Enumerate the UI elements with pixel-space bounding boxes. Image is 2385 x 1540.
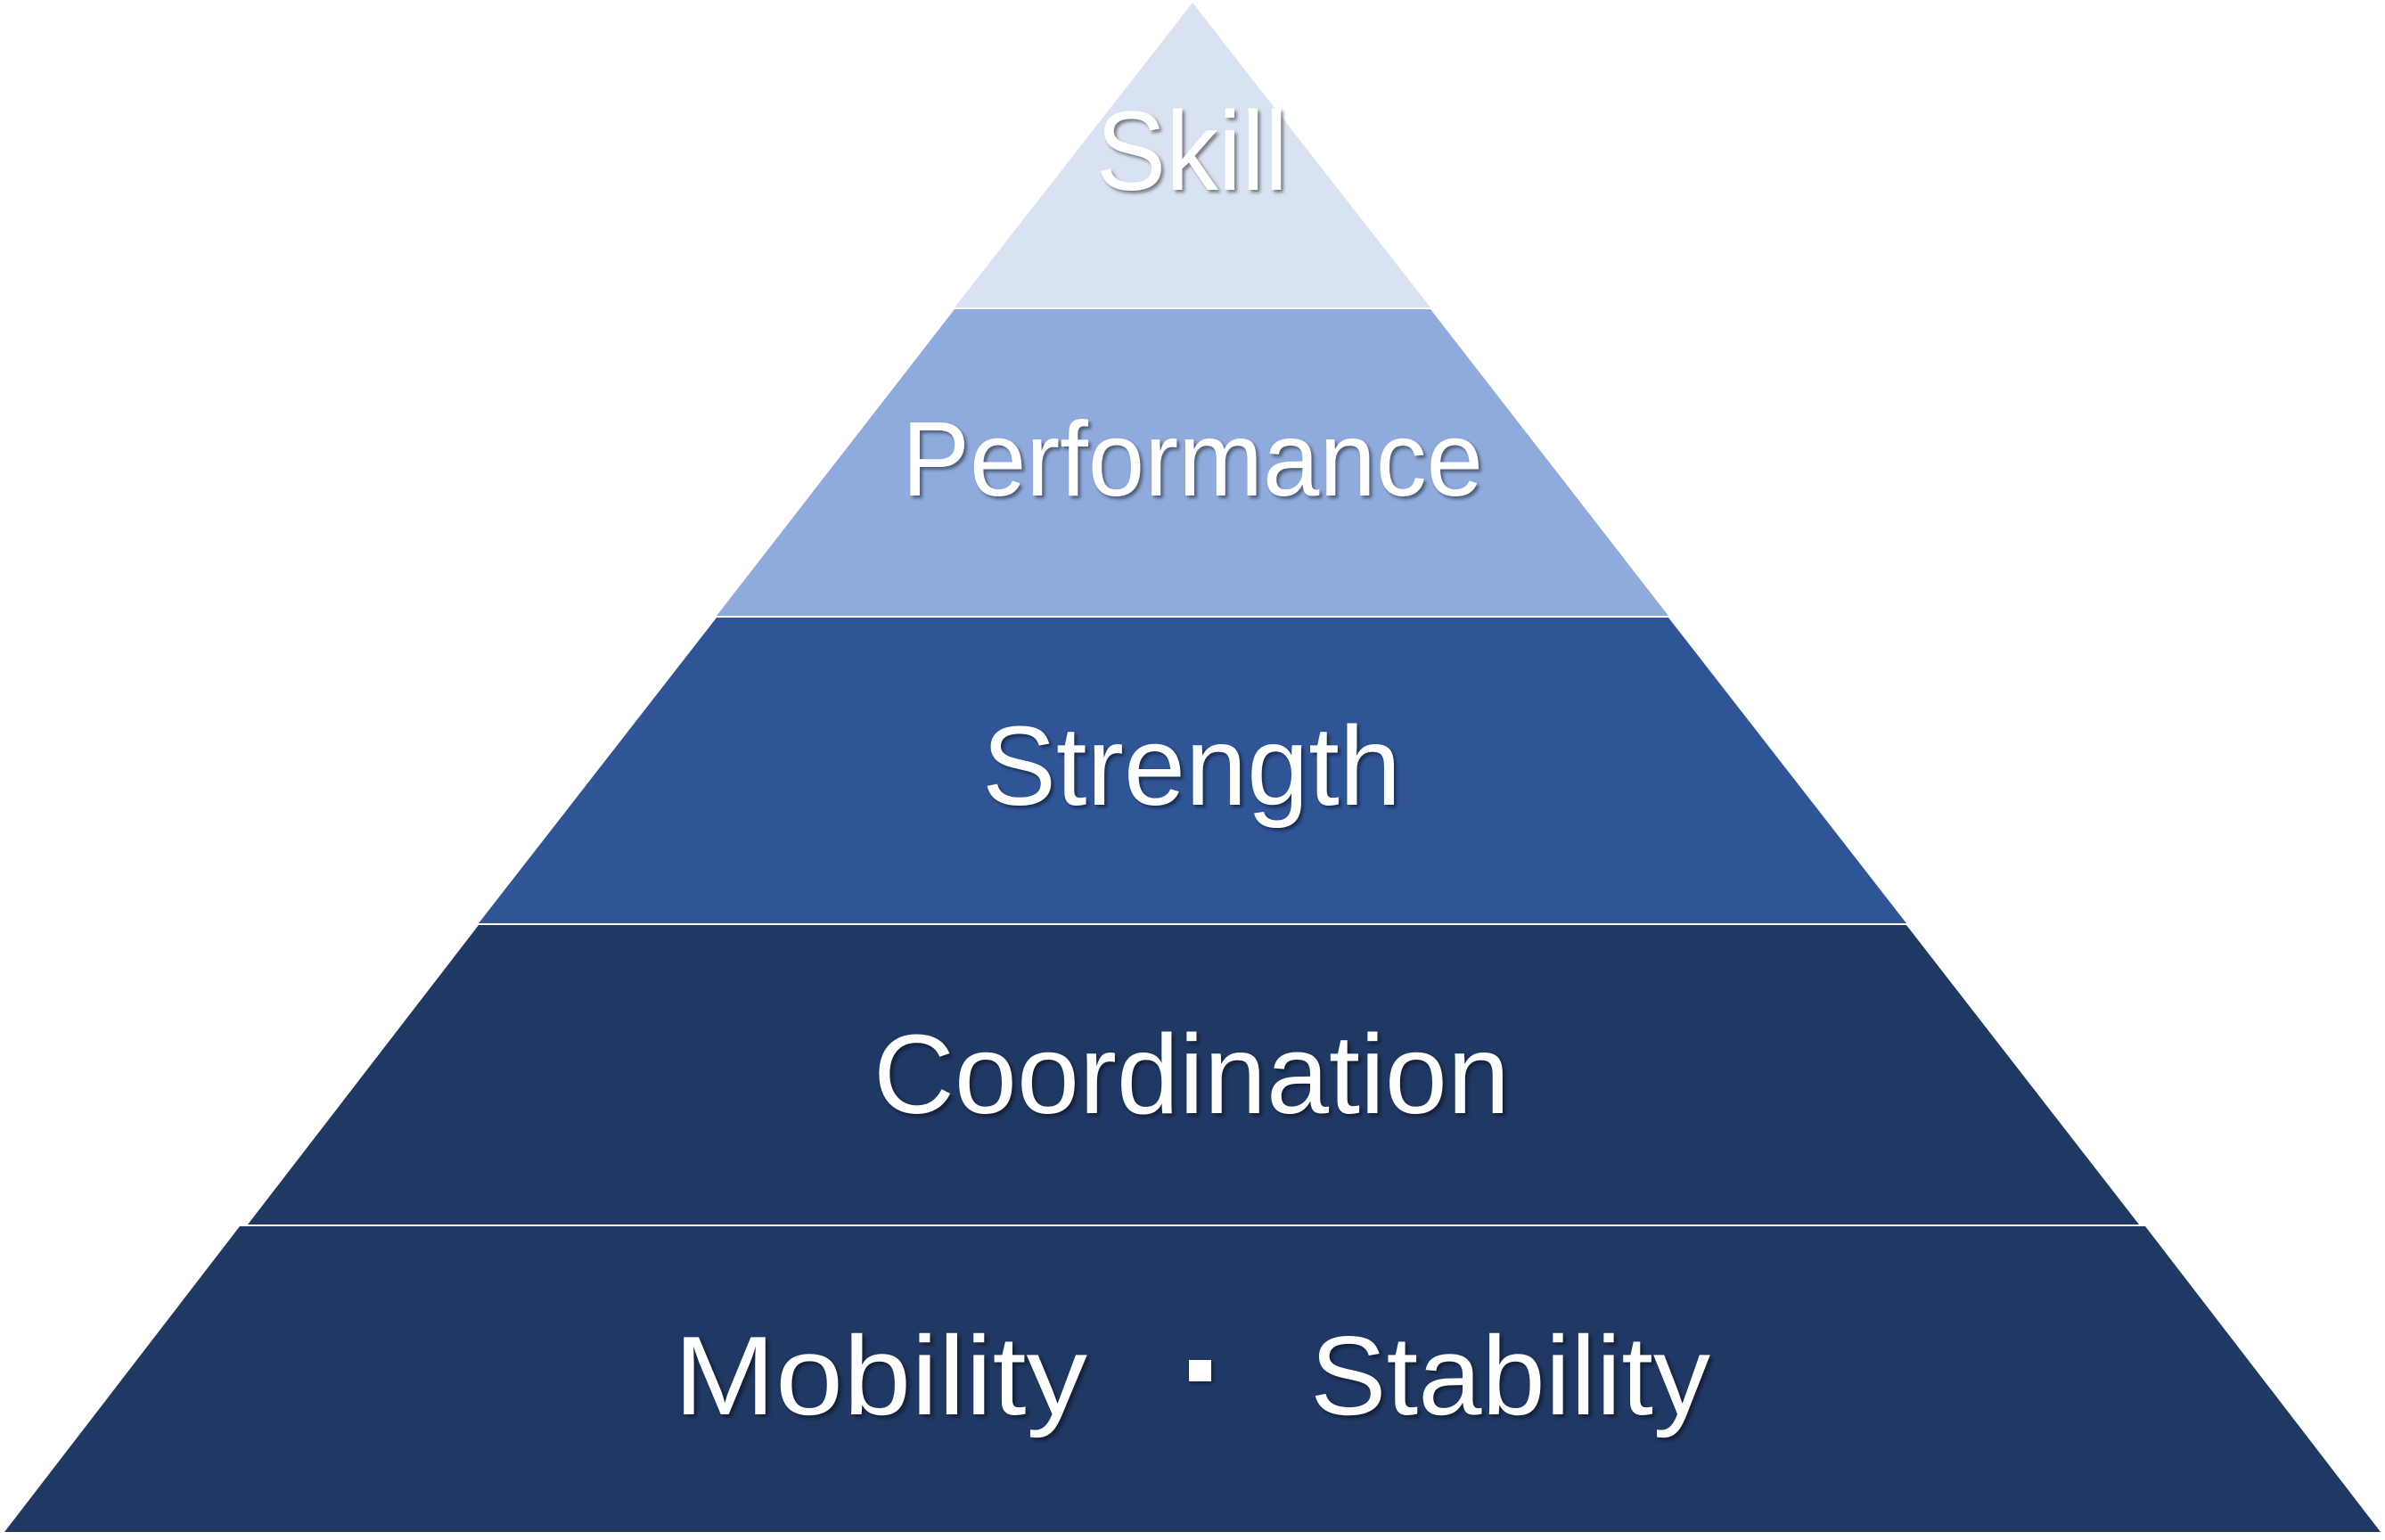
tier: Skill: [955, 3, 1430, 307]
tier: Mobility and Stability: [4, 1226, 2381, 1532]
tier: Coordination: [248, 925, 2139, 1225]
label: Skill: Skill: [1096, 88, 1288, 214]
label: Coordination: Coordination: [873, 1012, 1510, 1137]
tier: Performance: [717, 309, 1668, 616]
label: Performance: Performance: [902, 400, 1483, 519]
label: Stability: Stability: [1310, 1313, 1710, 1438]
label: Strength: Strength: [982, 703, 1401, 829]
label: Mobility: Mobility: [674, 1313, 1087, 1438]
separator square: [1189, 1360, 1211, 1381]
tier: Strength: [479, 618, 1906, 923]
